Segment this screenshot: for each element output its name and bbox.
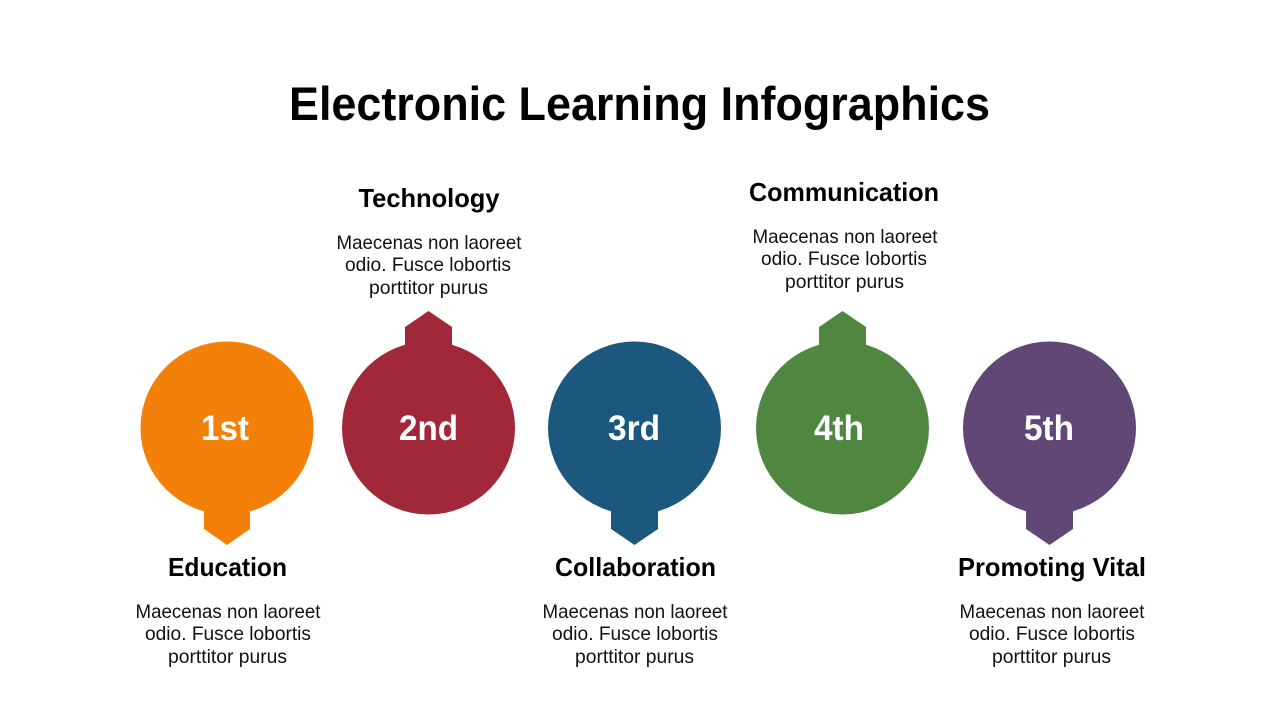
number 3rd: 3rd [608,409,660,448]
icon: purple pin 5th [963,342,1136,545]
number 5th: 5th [1024,409,1074,448]
text block: promoting vital [960,601,1145,668]
text block: collaboration: Maecenas non laoreet [542,601,728,623]
step 5: promoting vital [958,342,1146,668]
text block: collaboration [542,601,728,668]
text block: communication: Maecenas non laoreet [752,226,938,248]
text block: technology: odio. Fusce lobortis [345,254,511,276]
number 4th: 4th [814,409,864,448]
text block: communication: porttitor purus [785,271,904,293]
heading: Collaboration: Collaboration [555,552,716,582]
icon: blue pin 3rd [548,342,721,545]
text block: education [136,601,321,668]
text block: technology: porttitor purus [369,277,488,299]
icon: green pin 4th [756,311,929,514]
text block: technology [336,232,522,299]
text block: communication: odio. Fusce lobortis [761,248,927,270]
step 3: collaboration [542,342,728,668]
text block: collaboration: odio. Fusce lobortis [552,623,718,645]
heading: Technology: Technology [358,183,500,213]
text block: collaboration: porttitor purus [575,646,694,668]
text block: communication [752,226,938,293]
heading: Communication: Communication [749,177,939,207]
text block: promoting vital: odio. Fusce lobortis [969,623,1135,645]
text block: education: odio. Fusce lobortis [145,623,311,645]
step 2: technology [336,183,522,514]
text block: promoting vital: Maecenas non laoreet [960,601,1145,623]
step 4: communication [749,177,939,514]
icon: red pin 2nd [342,311,515,514]
text block: technology: Maecenas non laoreet [336,232,522,254]
heading: Promoting Vital: Promoting Vital [958,552,1146,582]
icon: orange pin 1st [140,342,314,545]
text block: education: porttitor purus [168,646,287,668]
step 1: education [136,342,321,668]
title: Electronic Learning Infographics [289,78,990,131]
text block: promoting vital: porttitor purus [992,646,1111,668]
number 2nd: 2nd [399,409,458,448]
text block: education: Maecenas non laoreet [136,601,321,623]
heading: Education: Education [168,552,287,582]
number 1st: 1st [201,409,249,448]
